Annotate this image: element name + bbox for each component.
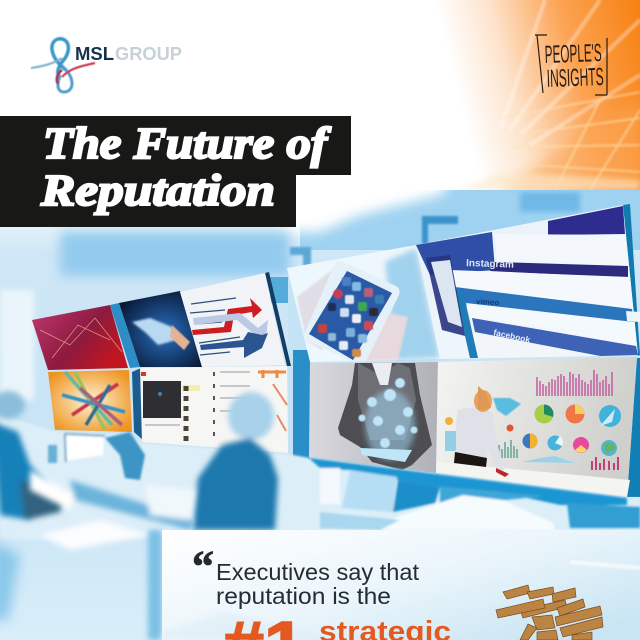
screen: video and web listing (140, 366, 288, 453)
screen: social media sites: facebook (493, 327, 531, 345)
quote text: reputation is the (216, 583, 391, 609)
logo: MSLGROUP (31, 39, 182, 92)
screen: blue world map with hand (119, 291, 202, 367)
screen: businessman with tablet (309, 362, 438, 473)
blurred foreground: desks and operators (0, 391, 640, 640)
logo: MSLGROUP: GROUP (115, 44, 182, 64)
quote text: Executives say that (216, 559, 420, 585)
orange light-burst header background (442, 0, 640, 190)
right desk monitors (309, 458, 640, 530)
screen: magenta network (32, 305, 128, 370)
operator: left figure (0, 391, 65, 520)
screen: social media sites: Instagram (466, 258, 514, 271)
screen: colourful arrows burst (48, 370, 132, 432)
bar chart (537, 370, 612, 396)
screen: phone with apps (287, 245, 440, 362)
title banner: Reputation (40, 166, 275, 215)
screen: social media sites: vimeo (476, 297, 500, 307)
blurred room background (0, 160, 640, 640)
screen: analyst with charts (436, 357, 637, 497)
woman analyst (454, 386, 509, 477)
logo: People's Insights (535, 35, 607, 95)
hero photo: control room (0, 160, 640, 640)
small bars and map (445, 398, 618, 470)
opening quote mark: “ (192, 542, 214, 591)
screen: social media sites (416, 205, 640, 359)
title banner (0, 116, 351, 227)
title banner: The Future of (43, 119, 332, 168)
operator: centre figure (193, 392, 278, 530)
blurred lower-left edge (0, 540, 20, 620)
quote text (216, 559, 420, 609)
screen: arrows chart (180, 273, 285, 367)
icon: collapsing wooden blocks (496, 585, 603, 640)
quote panel (162, 530, 640, 640)
desk monitor left (48, 432, 145, 480)
logo: MSLGROUP: MSL (75, 44, 114, 64)
highlight: #1 strategic (225, 620, 450, 640)
wall pillars (110, 204, 640, 497)
pie charts (445, 404, 621, 456)
blurred desk streaks (30, 470, 195, 640)
